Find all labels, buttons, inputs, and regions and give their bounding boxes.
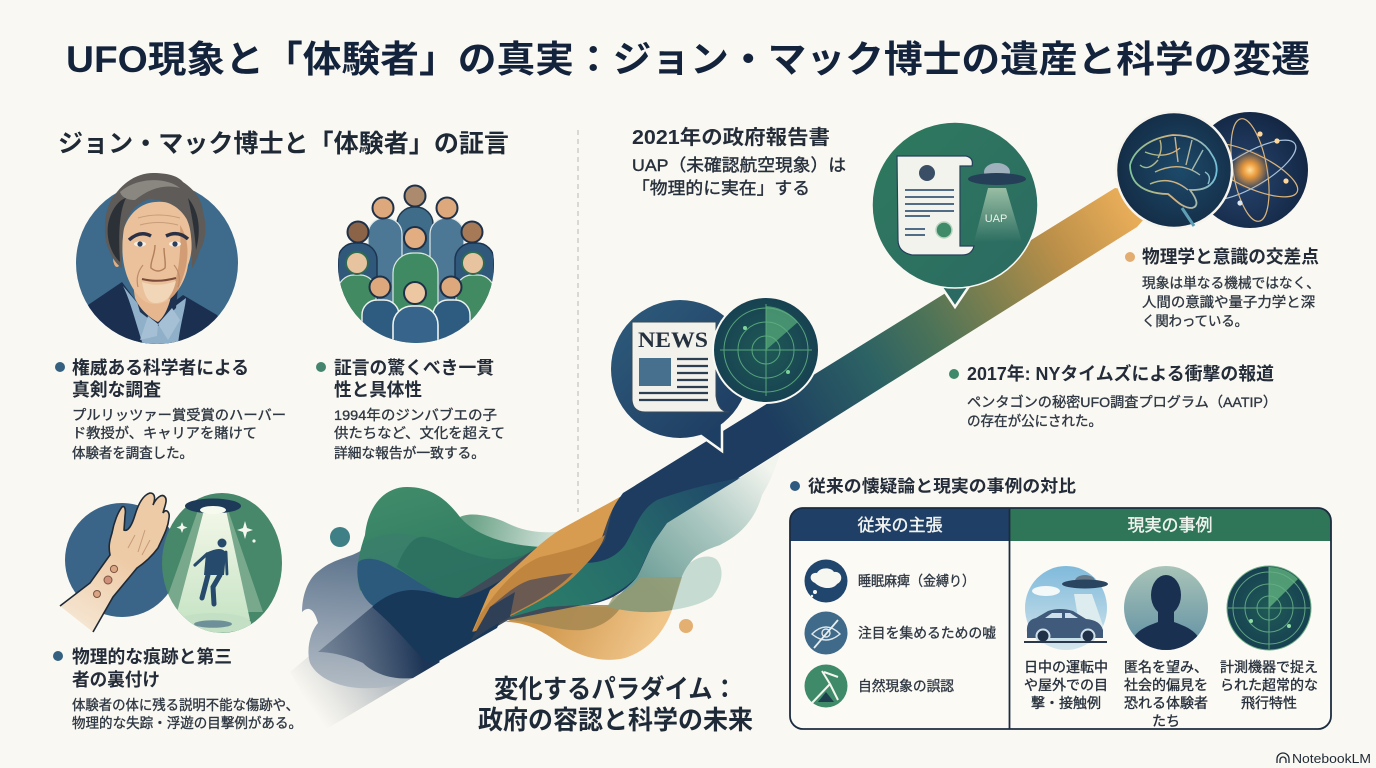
table header: actual cases bbox=[1010, 508, 1331, 541]
claim: natural phenomenon bbox=[804, 664, 954, 708]
text block: 2021 government report bbox=[632, 126, 846, 198]
icon: scarred arm and abduction beam bbox=[60, 493, 282, 633]
text block: physics and consciousness: 現象は単なる機械ではなく、 bbox=[1142, 275, 1320, 291]
text block: authoritative scientist bbox=[55, 357, 286, 461]
text block: physics and consciousness bbox=[1125, 246, 1320, 329]
case: daytime sighting: や屋外での目 bbox=[1024, 677, 1108, 693]
icon: portrait of Dr. John Mack bbox=[70, 173, 240, 350]
icon: crowd of experiencers bbox=[338, 184, 494, 343]
heading: changing paradigm: 変化するパラダイム： bbox=[494, 674, 737, 704]
case: instrument radar: 飛行特性 bbox=[1241, 695, 1297, 711]
text block: authoritative scientist: 権威ある科学者による bbox=[72, 357, 249, 378]
divider bbox=[577, 130, 579, 512]
icon: brain and atom circles bbox=[1116, 112, 1308, 228]
text block: consistency of testimony: 供たちなど、文化を超えて bbox=[334, 425, 505, 441]
case: anonymous witness: 匿名を望み、 bbox=[1124, 659, 1208, 675]
radar bbox=[713, 297, 819, 403]
text block: 2017 NY Times bbox=[949, 363, 1277, 429]
claim: sleep paralysis: 睡眠麻痺（金縛り） bbox=[858, 573, 975, 589]
UFO and beam: UAP bbox=[985, 213, 1007, 225]
text block: physics and consciousness: く関わっている。 bbox=[1142, 313, 1248, 329]
text block: physics and consciousness: 人間の意識や量子力学と深 bbox=[1142, 294, 1315, 310]
text block: 2021 government report: 「物理的に実在」する bbox=[632, 179, 810, 198]
case: instrument radar: 計測機器で捉え bbox=[1220, 659, 1318, 675]
chart: rising paradigm band with waves bbox=[290, 188, 1165, 731]
claim: sleep paralysis bbox=[804, 560, 975, 602]
text block: consistency of testimony: 性と具体性 bbox=[334, 380, 422, 400]
text block: physical traces: 体験者の体に残る説明不能な傷跡や、 bbox=[72, 697, 299, 713]
case: anonymous witness bbox=[1124, 566, 1208, 729]
heading: skepticism vs cases: 従来の懐疑論と現実の事例の対比 bbox=[808, 477, 1076, 496]
text block: consistency of testimony: 証言の驚くべき一貫 bbox=[334, 358, 494, 378]
heading: changing paradigm bbox=[478, 674, 753, 735]
title: UFO現象と「体験者」の真実：ジョン・マック博士の遺産と科学の変遷 bbox=[66, 39, 1310, 80]
icon: news bubble with radar bbox=[611, 297, 819, 451]
table header: conventional claims bbox=[790, 508, 1010, 541]
text block: authoritative scientist: 真剣な調査 bbox=[72, 380, 161, 400]
newspaper bbox=[632, 322, 729, 412]
text block: 2021 government report: 2021年の政府報告書 bbox=[632, 126, 830, 149]
claim: attention-seeking lie bbox=[804, 612, 996, 654]
icon: government report bubble with UAP bbox=[872, 122, 1038, 307]
text block: consistency of testimony: 詳細な報告が一致する。 bbox=[334, 445, 485, 461]
case: instrument radar bbox=[1220, 566, 1318, 711]
text block: 2017 NY Times: の存在が公にされた。 bbox=[967, 413, 1102, 429]
claim: attention-seeking lie: 注目を集めるための嘘 bbox=[858, 625, 996, 641]
case: daytime sighting bbox=[1024, 566, 1108, 711]
table header: actual cases: 現実の事例 bbox=[1128, 516, 1212, 535]
case: anonymous witness: たち bbox=[1152, 713, 1180, 729]
table header: conventional claims: 従来の主張 bbox=[858, 516, 942, 535]
text block: physical traces: 者の裏付け bbox=[72, 670, 160, 690]
case: instrument radar: られた超常的な bbox=[1220, 677, 1318, 693]
text block: 2021 government report: UAP（未確認航空現象）は bbox=[632, 156, 846, 175]
heading: changing paradigm: 政府の容認と科学の未来 bbox=[478, 705, 753, 735]
case: anonymous witness: 社会的偏見を bbox=[1124, 677, 1208, 693]
text block: authoritative scientist: 体験者を調査した。 bbox=[72, 445, 193, 461]
text block: 2017 NY Times: ペンタゴンの秘密UFO調査プログラム（AATIP） bbox=[967, 394, 1277, 410]
panel: comparison table bbox=[790, 508, 1331, 729]
text block: 2017 NY Times: 2017年: NYタイムズによる衝撃の報道 bbox=[967, 363, 1274, 384]
case: daytime sighting: 撃・接触例 bbox=[1031, 695, 1101, 711]
text block: physical traces bbox=[53, 646, 302, 731]
text block: authoritative scientist: ド教授が、キャリアを賭けて bbox=[72, 425, 257, 441]
panel: left column heading: ジョン・マック博士と「体験者」の証言 bbox=[58, 130, 509, 158]
text block: consistency of testimony bbox=[316, 358, 505, 461]
case: anonymous witness: 恐れる体験者 bbox=[1124, 695, 1208, 711]
text block: authoritative scientist: プルリッツァー賞受賞のハーバー bbox=[72, 407, 286, 423]
claim: natural phenomenon: 自然現象の誤認 bbox=[858, 678, 954, 694]
text block: physical traces: 物理的な痕跡と第三 bbox=[72, 646, 232, 667]
logo: NotebookLM: NotebookLM bbox=[1292, 752, 1371, 766]
document bbox=[897, 156, 974, 255]
UFO and beam bbox=[968, 163, 1026, 242]
newspaper: NEWS bbox=[638, 327, 708, 352]
text block: physics and consciousness: 物理学と意識の交差点 bbox=[1142, 246, 1319, 267]
text block: physical traces: 物理的な失踪・浮遊の目撃例がある。 bbox=[72, 715, 302, 731]
text block: consistency of testimony: 1994年のジンバブエの子 bbox=[334, 407, 497, 423]
case: daytime sighting: 日中の運転中 bbox=[1024, 659, 1108, 675]
